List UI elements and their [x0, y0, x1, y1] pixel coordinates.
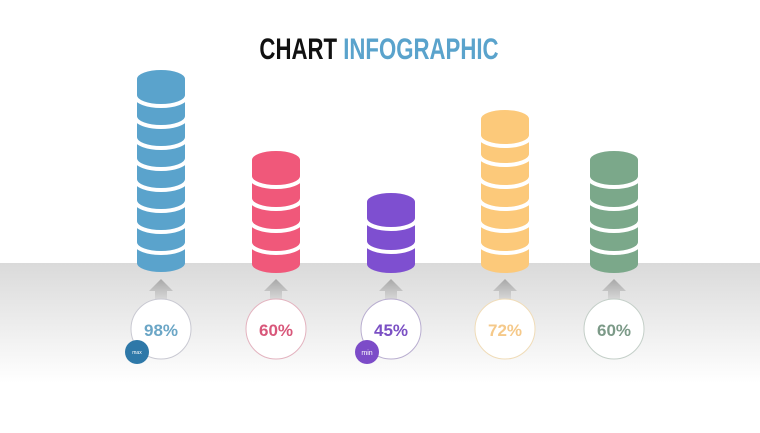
value circle: 45%	[361, 299, 421, 359]
arrow: yellow	[493, 279, 517, 301]
value circle: 60% green	[584, 299, 644, 359]
value circle: 72%	[475, 299, 535, 359]
value circle: 98%: 98%	[144, 321, 178, 340]
badge: max: max	[132, 350, 142, 356]
value circle: 60% green: 60%	[597, 321, 631, 340]
arrow: green	[602, 279, 626, 301]
value circle: 60% pink: 60%	[259, 321, 293, 340]
value circle: 98%	[131, 299, 191, 359]
badge: min: min	[361, 350, 373, 357]
stack: yellow 72%	[481, 110, 529, 273]
stack: purple 45%	[367, 193, 415, 273]
arrow: purple	[379, 279, 403, 301]
stack: green 60%	[590, 151, 638, 273]
badge: min	[355, 340, 379, 364]
value circle: 60% pink	[246, 299, 306, 359]
arrow: pink	[264, 279, 288, 301]
value circle: 72%: 72%	[488, 321, 522, 340]
arrow: blue	[149, 279, 173, 301]
stack: pink 60%	[252, 151, 300, 273]
value circle: 45%: 45%	[374, 321, 408, 340]
title: CHART INFOGRAPHIC	[259, 32, 499, 66]
badge: max	[125, 340, 149, 364]
stack: blue 98%	[137, 70, 185, 272]
